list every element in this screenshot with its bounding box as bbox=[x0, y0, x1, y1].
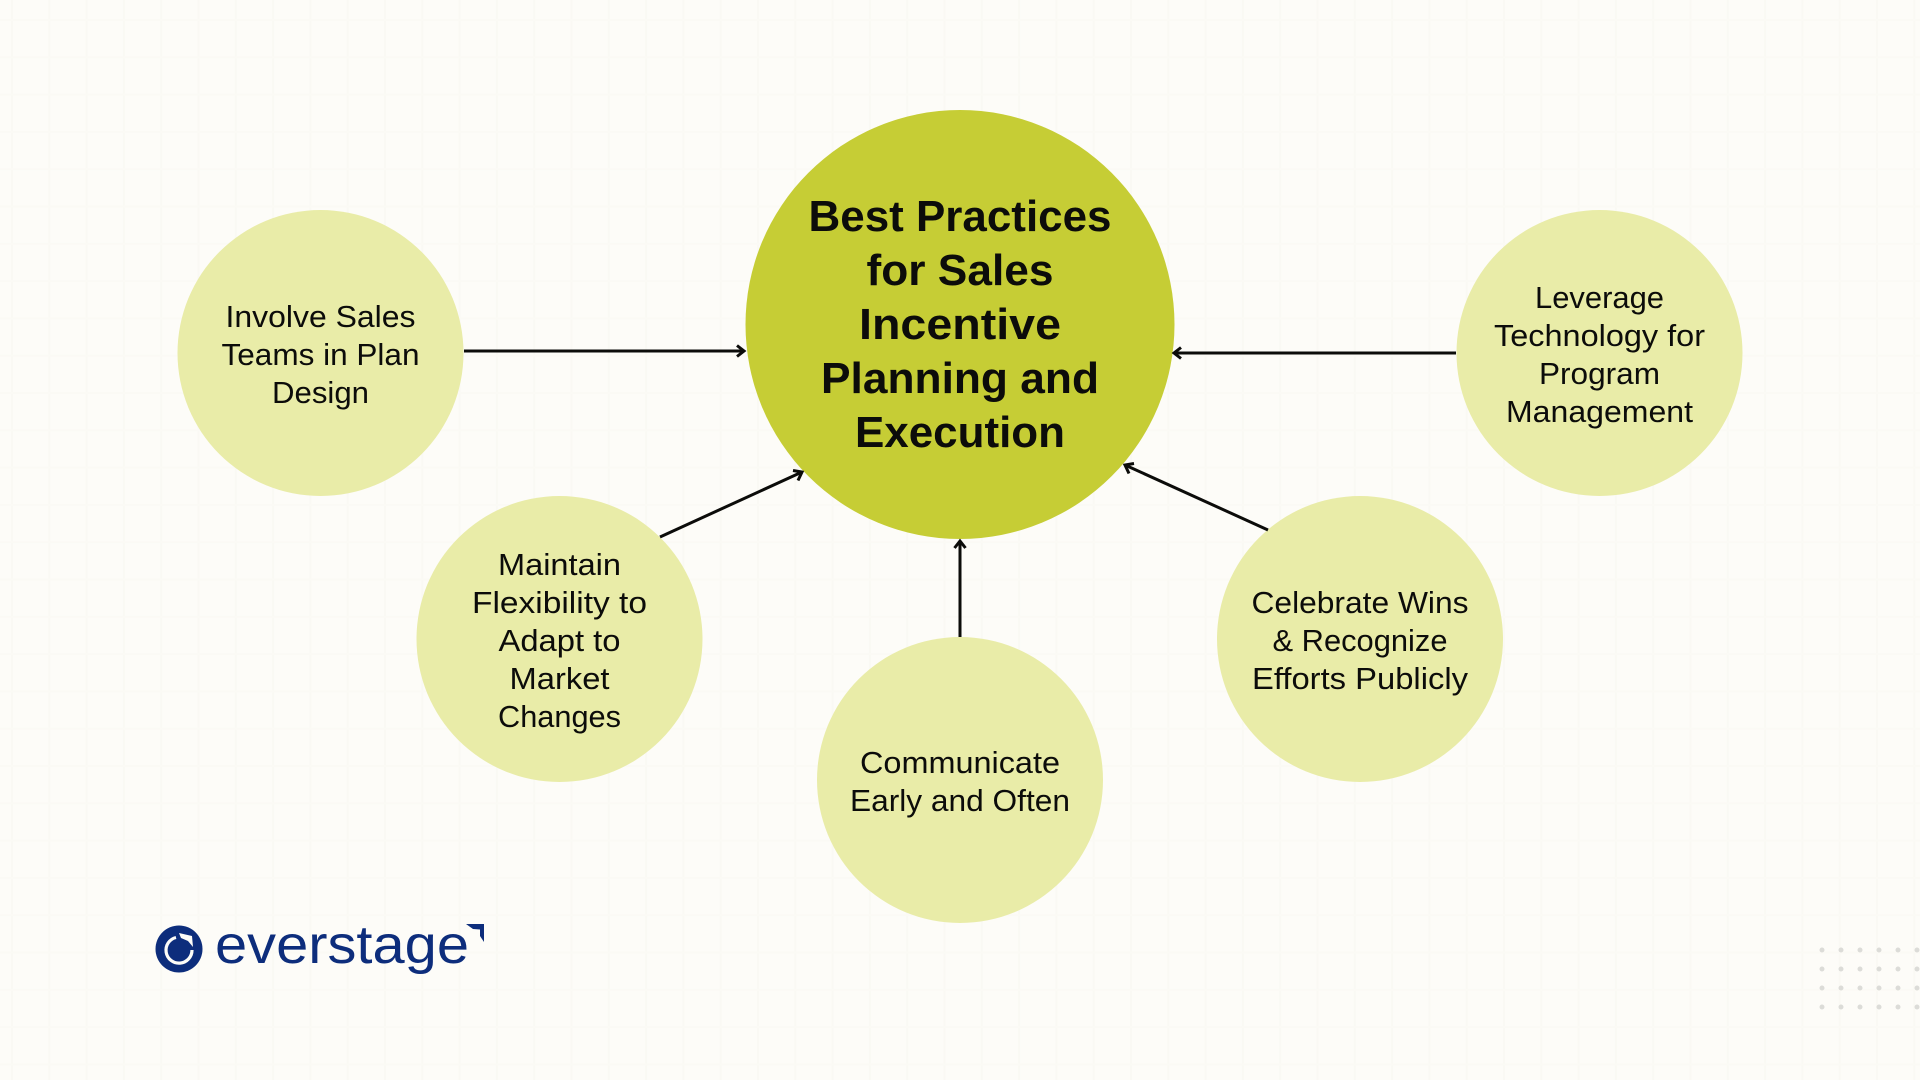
decorative dot grid bbox=[1820, 948, 1920, 1010]
arrow: lower-left node to centre bbox=[660, 470, 802, 537]
icon: logo mark bbox=[156, 926, 202, 972]
node: Communicate Early and Often: Early and Often bbox=[850, 783, 1070, 818]
node: Leverage Technology for Program Management: Program bbox=[1539, 356, 1660, 391]
arrow: bottom node to centre bbox=[954, 541, 966, 637]
node: Maintain Flexibility to Adapt to Market Changes bbox=[416, 496, 702, 782]
central circle: title bbox=[746, 110, 1174, 539]
arrow: lower-right node to centre bbox=[1125, 464, 1268, 530]
node: Maintain Flexibility to Adapt to Market Changes: Changes bbox=[498, 699, 621, 734]
title: Incentive bbox=[859, 300, 1061, 349]
logo wordmark: everstage bbox=[215, 915, 469, 975]
logo: everstage bbox=[156, 915, 484, 975]
node: Celebrate Wins and Recognize Efforts Publicly: Celebrate Wins bbox=[1252, 585, 1468, 620]
node: Leverage Technology for Program Management: Management bbox=[1506, 394, 1693, 429]
node: Involve Sales Teams in Plan Design: Involve Sales bbox=[226, 299, 416, 334]
node: Involve Sales Teams in Plan Design bbox=[178, 210, 464, 496]
title: for Sales bbox=[866, 246, 1054, 295]
node: Leverage Technology for Program Management bbox=[1456, 210, 1742, 496]
icon: logo corner mark bbox=[466, 924, 484, 942]
node: Involve Sales Teams in Plan Design: Design bbox=[272, 375, 369, 410]
arrow: left node to centre bbox=[464, 346, 744, 356]
node: Celebrate Wins and Recognize Efforts Publicly: Efforts Publicly bbox=[1252, 661, 1469, 696]
title: Best Practices bbox=[808, 192, 1112, 241]
node: Maintain Flexibility to Adapt to Market Changes: Adapt to bbox=[498, 623, 620, 658]
title bbox=[808, 192, 1112, 457]
node: Involve Sales Teams in Plan Design: Teams in Plan bbox=[222, 337, 420, 372]
node: Maintain Flexibility to Adapt to Market Changes: Maintain bbox=[498, 547, 621, 582]
node: Celebrate Wins and Recognize Efforts Publicly bbox=[1217, 496, 1503, 782]
node: Leverage Technology for Program Management: Technology for bbox=[1494, 318, 1705, 353]
node: Communicate Early and Often bbox=[817, 637, 1103, 923]
node: Celebrate Wins and Recognize Efforts Publicly: & Recognize bbox=[1272, 623, 1448, 658]
title: Execution bbox=[855, 408, 1065, 457]
node: Maintain Flexibility to Adapt to Market Changes: Flexibility to bbox=[472, 585, 647, 620]
title: Planning and bbox=[821, 354, 1099, 403]
arrow: right node to centre bbox=[1174, 348, 1456, 358]
node: Maintain Flexibility to Adapt to Market Changes: Market bbox=[510, 661, 610, 696]
node: Communicate Early and Often: Communicate bbox=[860, 745, 1060, 780]
node: Leverage Technology for Program Management: Leverage bbox=[1535, 280, 1664, 315]
